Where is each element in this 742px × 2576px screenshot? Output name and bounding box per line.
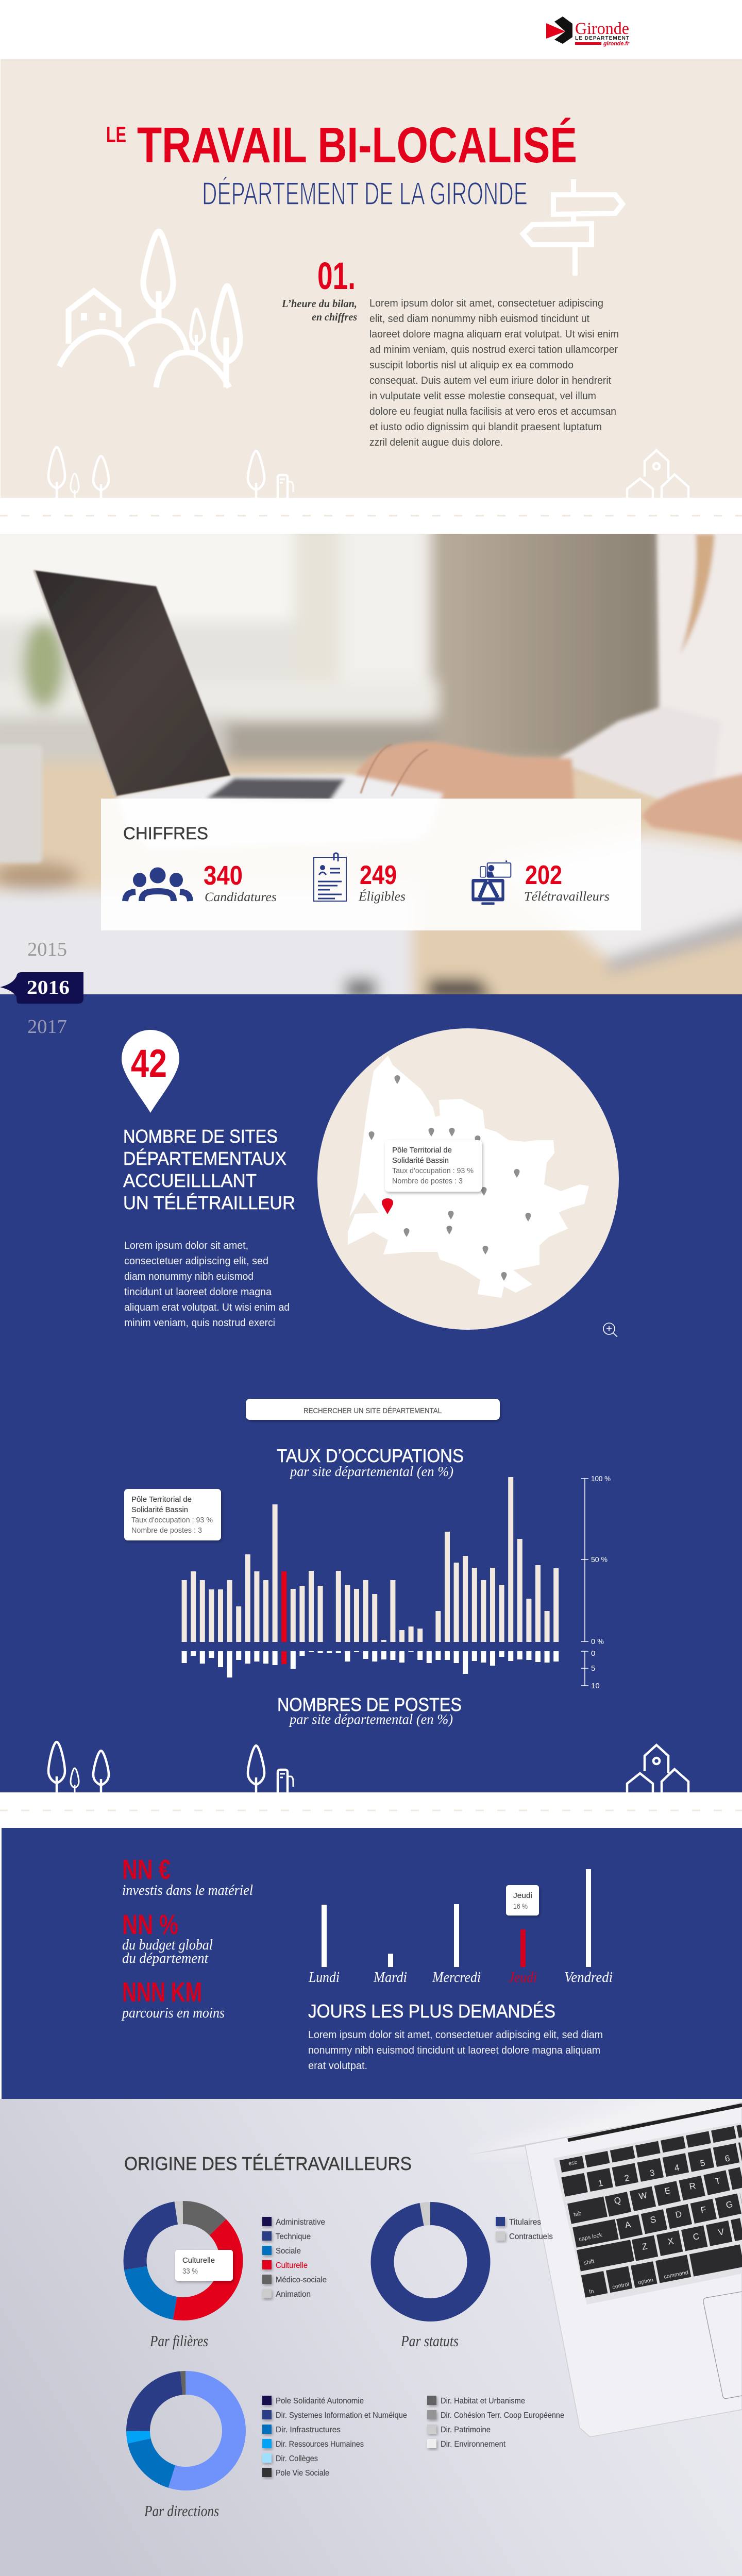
axis: occupancy rate: 0 % — [591, 1637, 604, 1646]
stat: candidatures: Candidatures — [205, 890, 277, 904]
caption: par directions: Par directions — [144, 2502, 219, 2520]
keyboard keys: X — [667, 2236, 674, 2247]
legend: filieres: Médico-sociale — [276, 2276, 327, 2284]
tooltip: chart site: Nombre de postes : 3 — [131, 1526, 202, 1535]
road with trees and church — [0, 1742, 742, 1828]
timeline: year 2015: 2015 — [27, 939, 67, 960]
stat: budget: du budget global — [122, 1937, 213, 1953]
tooltip: chart site: Pôle Territorial de — [131, 1495, 192, 1504]
legend: directions: Dir. Ressources Humaines — [276, 2440, 364, 2449]
keyboard keys: 3 — [649, 2167, 655, 2178]
keyboard keys: R — [688, 2181, 697, 2192]
tooltip: chart site — [124, 1489, 221, 1540]
legend: filieres: Sociale — [276, 2247, 301, 2256]
text block: sites: consectetuer adipiscing elit, sed — [124, 1256, 268, 1267]
text block: jours: nonummy nibh euismod tincidunt ut laoreet dolore magna aliquam — [308, 2045, 600, 2056]
bar chart: days: Jeudi — [509, 1970, 537, 1986]
section: origin background — [0, 2099, 742, 2576]
legend: statuts — [496, 2217, 553, 2241]
heading: nombre de sites — [123, 1126, 295, 1213]
section: blue sites background — [0, 994, 742, 1792]
heading: nombre de sites: ACCUEILLLANT — [123, 1170, 257, 1191]
keyboard keys: 1 — [597, 2178, 604, 2189]
heading: taux d'occupations: TAUX D’OCCUPATIONS — [277, 1445, 464, 1466]
legend: directions: Dir. Environnement — [441, 2440, 506, 2449]
donut: par statuts — [382, 2213, 479, 2310]
title: TRAVAIL BI-LOCALISÉ — [137, 117, 577, 173]
timeline: year 2017: 2017 — [27, 1016, 67, 1038]
axis: number of posts — [581, 1649, 600, 1690]
keyboard keys: D — [674, 2209, 683, 2220]
legend: directions: Dir. Patrimoine — [441, 2426, 491, 2434]
panel: chiffres — [101, 799, 641, 930]
keyboard keys: 5 — [699, 2158, 706, 2168]
photo: laptop keyboard — [466, 2081, 742, 2437]
text block: intro — [369, 298, 619, 448]
keyboard keys: control — [612, 2281, 630, 2291]
keyboard keys: fn — [588, 2288, 595, 2295]
keyboard keys: W — [638, 2190, 648, 2201]
button: search site — [246, 1399, 500, 1420]
section subtitle — [281, 297, 357, 323]
icon: teleworking screens — [471, 860, 511, 905]
keyboard keys: S — [649, 2214, 657, 2225]
keyboard keys: shift — [583, 2258, 595, 2266]
stat: materiel: NN € — [122, 1854, 171, 1885]
stat: teletravailleurs: Télétravailleurs — [524, 890, 610, 904]
text block: intro: ad minim veniam, quis nostrud exerci tation ullamcorper — [369, 344, 618, 355]
icon: signpost — [523, 179, 622, 276]
pin with number 42 — [122, 1030, 179, 1113]
stat: candidatures — [204, 861, 277, 904]
stat: teletravailleurs: 202 — [525, 860, 562, 890]
text block: sites: aliquam erat volutpat. Ut wisi enim ad — [124, 1302, 290, 1313]
heading: nombres de postes: par site départemental (en %) — [289, 1711, 453, 1727]
tooltip: site: Solidarité Bassin — [392, 1156, 449, 1165]
heading: taux d'occupations — [277, 1445, 464, 1479]
stat: budget: du département — [122, 1951, 209, 1967]
heading: origine: ORIGINE DES TÉLÉTRAVAILLEURS — [124, 2153, 412, 2174]
illustration: village and trees — [59, 231, 240, 387]
axis: occupancy rate — [581, 1475, 611, 1646]
text block: sites: minim veniam, quis nostrud exerci — [124, 1317, 275, 1329]
stat: budget — [122, 1909, 213, 1967]
tooltip: jeudi: Jeudi — [513, 1891, 532, 1900]
icon: zoom — [603, 1323, 617, 1337]
stat: materiel — [122, 1854, 253, 1899]
heading: chiffres: CHIFFRES — [123, 824, 208, 843]
text block: intro: elit, sed diam nonummy nibh euismod tincidunt ut — [369, 313, 589, 325]
text block: intro: consequat. Duis autem vel eum iriure dolor in hendrerit — [369, 375, 611, 386]
section subtitle: en chiffres — [312, 311, 357, 323]
bar chart: days: Lundi — [308, 1970, 340, 1986]
keyboard keys — [568, 2153, 734, 2295]
keyboard keys: tab — [573, 2210, 582, 2218]
stat: candidatures: 340 — [204, 861, 243, 891]
text block: jours: erat volutpat. — [308, 2060, 367, 2072]
heading: nombres de postes — [277, 1694, 462, 1727]
stat: kilometres: parcouris en moins — [121, 2005, 225, 2021]
map circle — [317, 1028, 619, 1330]
section subtitle: L’heure du bilan, — [281, 297, 357, 310]
stat: eligibles: Éligibles — [358, 889, 406, 904]
section number 01: 01. — [317, 255, 356, 297]
legend: filieres: Animation — [276, 2290, 311, 2299]
logo: Gironde: gironde.fr — [603, 41, 630, 47]
logo: Gironde — [546, 16, 630, 47]
timeline: active year 2016 — [0, 972, 83, 1004]
tooltip: jeudi — [506, 1885, 539, 1916]
keyboard keys: command — [663, 2269, 689, 2280]
heading: nombre de sites: NOMBRE DE SITES — [123, 1126, 278, 1147]
keyboard keys: E — [664, 2185, 671, 2196]
caption: par filieres: Par filières — [149, 2332, 208, 2350]
stat: eligibles — [358, 860, 406, 904]
photo: person typing on a laptop — [0, 515, 742, 1015]
text block: intro: et iusto odio dignissim qui blandit praesent luptatum — [369, 421, 602, 433]
keyboard keys: 6 — [724, 2153, 731, 2164]
stat: eligibles: 249 — [360, 860, 397, 890]
legend: filieres — [262, 2217, 327, 2299]
icon: document — [314, 853, 346, 901]
legend: filieres: Culturelle — [276, 2261, 308, 2270]
stat: materiel: investis dans le matériel — [122, 1883, 253, 1899]
tooltip: site: Nombre de postes : 3 — [392, 1177, 463, 1185]
tooltip: culturelle: Culturelle — [182, 2256, 215, 2265]
heading: nombre de sites: UN TÉLÉTRAILLEUR — [123, 1192, 295, 1213]
text block: intro: suscipit lobortis nisl ut aliquip ex ea commodo — [369, 360, 574, 371]
pin with number 42: 42 — [131, 1042, 167, 1086]
tooltip: site — [385, 1140, 482, 1192]
axis: occupancy rate: 100 % — [591, 1475, 611, 1483]
road with trees and church — [0, 447, 742, 533]
legend: directions — [262, 2396, 564, 2478]
section: blue budget background — [2, 1828, 742, 2099]
legend: directions: Pole Solidarité Autonomie — [276, 2397, 364, 2405]
keyboard keys: caps lock — [578, 2232, 603, 2243]
logo: Gironde: LE DEPARTEMENT — [575, 36, 629, 41]
axis: number of posts: 10 — [591, 1682, 600, 1690]
icon: people — [125, 868, 190, 901]
keyboard keys: Z — [641, 2241, 648, 2252]
legend: directions: Dir. Systemes Information et Numéique — [276, 2411, 407, 2420]
stat: budget: NN % — [122, 1909, 178, 1940]
text block: intro: laoreet dolore magna aliquam erat volutpat. Ut wisi enim — [369, 329, 619, 340]
heading: taux d'occupations: par site départemental (en %) — [289, 1464, 453, 1479]
axis: number of posts: 0 — [591, 1649, 595, 1658]
tooltip: site: Pôle Territorial de — [392, 1146, 452, 1155]
bar chart: days — [308, 1869, 613, 1986]
caption: par statuts: Par statuts — [400, 2332, 459, 2350]
stat: kilometres — [121, 1977, 225, 2021]
text block: intro: in vulputate velit esse molestie consequat, vel illum — [369, 391, 596, 402]
map pins — [369, 1075, 531, 1281]
legend: statuts: Titulaires — [509, 2218, 541, 2227]
keyboard keys: V — [717, 2227, 726, 2238]
legend: filieres: Technique — [276, 2232, 311, 2241]
text block: intro: dolore eu feugiat nulla facilisis at vero eros et accumsan — [369, 406, 616, 417]
keyboard keys: esc — [568, 2159, 578, 2167]
bar chart: days: Vendredi — [564, 1970, 613, 1986]
logo: Gironde: Gironde — [575, 20, 629, 38]
text block: intro: zzril delenit augue duis dolore. — [369, 437, 503, 448]
keyboard keys: option — [637, 2277, 654, 2286]
text block: jours: Lorem ipsum dolor sit amet, consectetuer adipiscing elit, sed diam — [308, 2029, 603, 2041]
keyboard keys: G — [725, 2199, 734, 2210]
tooltip: jeudi: 16 % — [513, 1902, 528, 1911]
keyboard keys: 2 — [623, 2173, 630, 2183]
legend: directions: Dir. Collèges — [276, 2454, 318, 2463]
section 1 background: beige intro — [1, 59, 742, 498]
heading: jours les plus demandes: JOURS LES PLUS DEMANDÉS — [308, 2001, 555, 2022]
legend: filieres: Administrative — [276, 2218, 325, 2227]
legend: statuts: Contractuels — [509, 2232, 553, 2241]
keyboard keys: 4 — [673, 2162, 680, 2173]
keyboard keys: F — [700, 2205, 707, 2215]
keyboard keys: T — [714, 2176, 721, 2187]
text block: sites — [124, 1240, 290, 1329]
selected pin — [382, 1198, 393, 1214]
subtitle: DÉPARTEMENT DE LA GIRONDE — [202, 176, 528, 212]
tooltip: culturelle: 33 % — [182, 2267, 198, 2276]
button: search site: RECHERCHER UN SITE DÉPARTEMENTAL — [303, 1406, 442, 1415]
bar chart: number of posts — [182, 1651, 559, 1677]
stat: kilometres: NNN KM — [122, 1977, 202, 2008]
text block: sites: Lorem ipsum dolor sit amet, — [124, 1240, 248, 1251]
heading: nombre de sites: DÉPARTEMENTAUX — [123, 1148, 286, 1169]
bar chart: days: Mercredi — [432, 1970, 481, 1986]
legend: directions: Dir. Infrastructures — [276, 2426, 341, 2434]
donut: par filieres — [135, 2212, 231, 2309]
keyboard keys: Q — [613, 2195, 622, 2206]
map: Gironde — [348, 1056, 589, 1298]
tooltip: chart site: Solidarité Bassin — [131, 1505, 188, 1514]
text block: intro: Lorem ipsum dolor sit amet, consectetuer adipiscing — [369, 298, 603, 309]
legend: directions: Dir. Cohésion Terr. Coop Européenne — [441, 2411, 564, 2420]
title: LE — [106, 122, 126, 147]
text block: sites: tincidunt ut laoreet dolore magna — [124, 1286, 272, 1298]
tooltip: site: Taux d'occupation : 93 % — [392, 1166, 474, 1175]
bar chart: days: Mardi — [373, 1970, 407, 1986]
legend: directions: Pole Vie Sociale — [276, 2469, 329, 2478]
heading: nombres de postes: NOMBRES DE POSTES — [277, 1694, 462, 1715]
keyboard keys: A — [624, 2219, 632, 2230]
stat: teletravailleurs — [524, 860, 610, 904]
text block: jours — [308, 2029, 603, 2072]
header band — [0, 0, 742, 59]
donut: par directions — [138, 2383, 234, 2479]
bar chart: occupancy rate — [182, 1477, 559, 1642]
axis: occupancy rate: 50 % — [591, 1555, 608, 1564]
keyboard keys: C — [692, 2231, 700, 2242]
tooltip: culturelle — [175, 2250, 233, 2281]
axis: number of posts: 5 — [591, 1664, 595, 1673]
timeline: active year 2016: 2016 — [27, 977, 70, 998]
legend: directions: Dir. Habitat et Urbanisme — [441, 2397, 525, 2405]
tooltip: chart site: Taux d'occupation : 93 % — [131, 1516, 213, 1524]
text block: sites: diam nonummy nibh euismod — [124, 1271, 254, 1282]
